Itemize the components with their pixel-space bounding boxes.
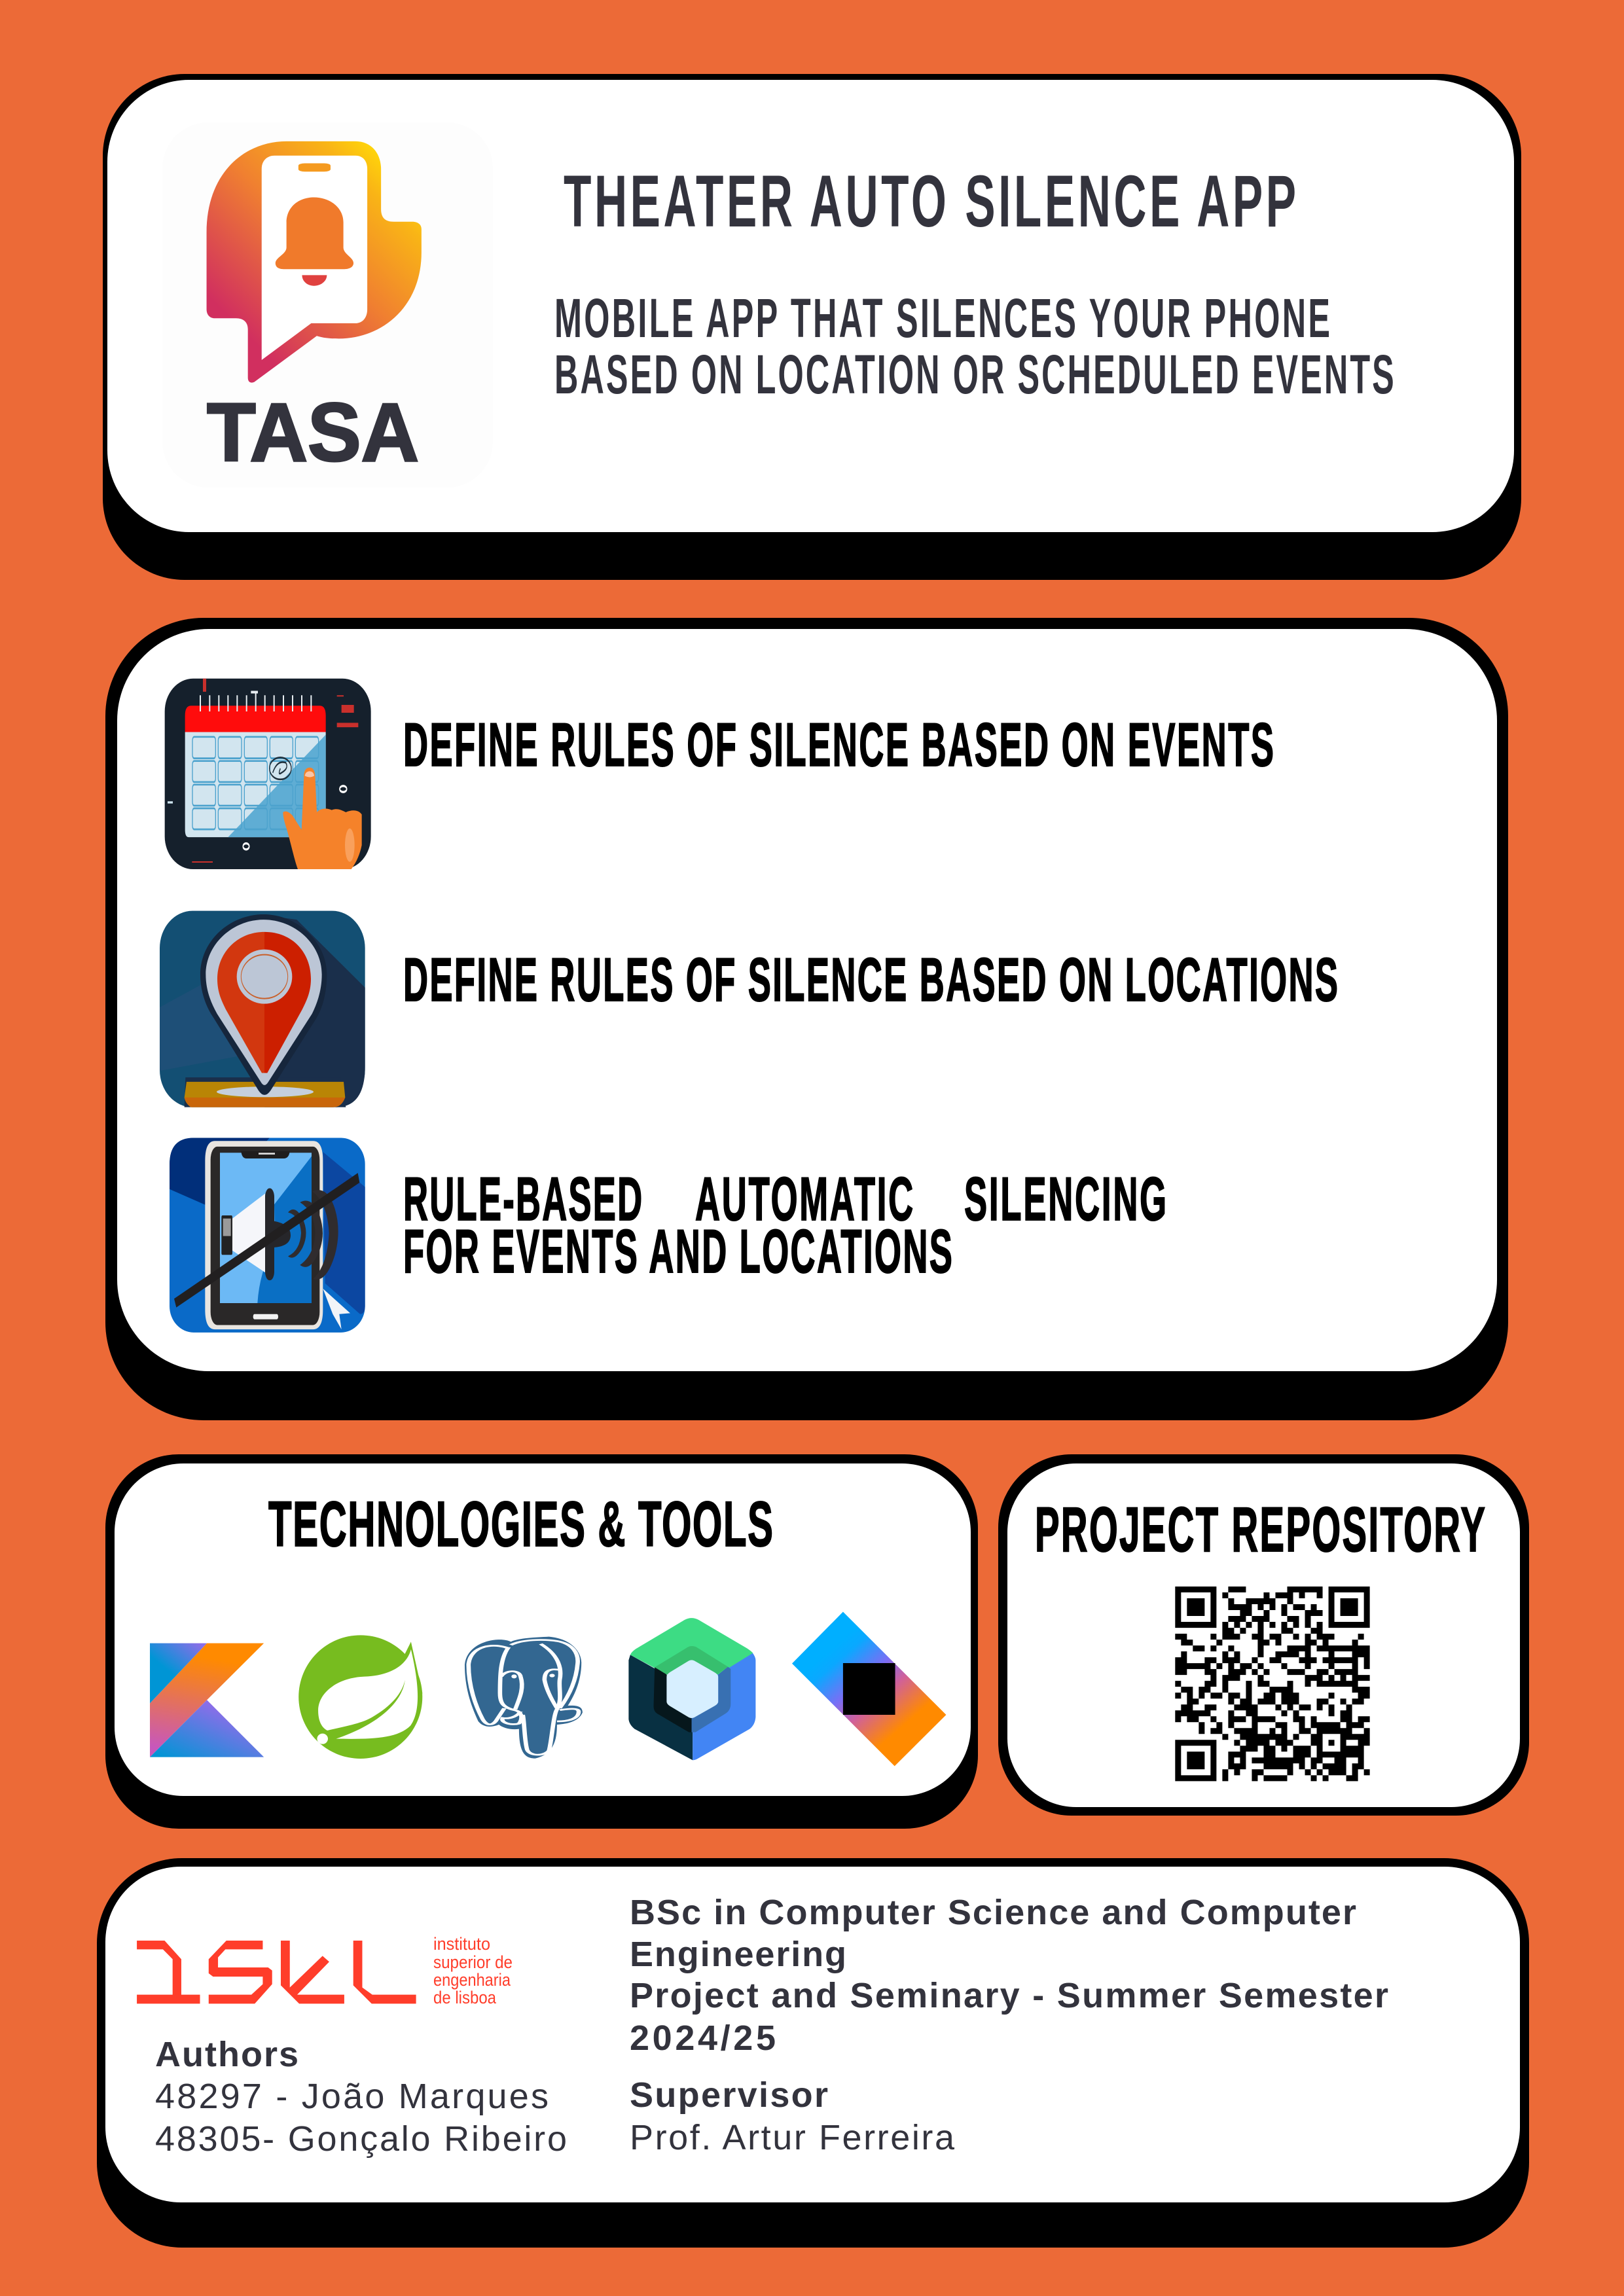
text: authors xyxy=(155,2035,567,2159)
text: feature 3 xyxy=(403,1165,1166,1286)
icon: ISEL logo: de lisboa xyxy=(433,1988,497,2007)
text: degree and project: Project and Seminary - Summer Semester xyxy=(630,1976,1388,2015)
text: feature 3: FOR EVENTS AND LOCATIONS xyxy=(403,1217,952,1286)
text: supervisor xyxy=(630,2075,955,2157)
subtitle xyxy=(554,287,1394,405)
panel: credits xyxy=(97,1858,1529,2248)
icon: phone with muted speaker xyxy=(170,1138,365,1333)
subtitle: MOBILE APP THAT SILENCES YOUR PHONE xyxy=(554,287,1330,349)
text: supervisor: Prof. Artur Ferreira xyxy=(630,2118,955,2157)
icon: Spring xyxy=(298,1635,422,1759)
text: feature 1: DEFINE RULES OF SILENCE BASED ON EVENTS xyxy=(403,711,1274,780)
panel: technologies and tools xyxy=(105,1454,978,1829)
panel: project repository xyxy=(998,1454,1529,1816)
icon: ISEL logo: superior de xyxy=(433,1952,513,1972)
icon: Kotlin xyxy=(150,1643,264,1757)
text: authors: Authors xyxy=(155,2035,298,2074)
text: degree and project: 2024/25 xyxy=(630,2018,776,2058)
icon: Jetpack Compose xyxy=(628,1618,755,1760)
icon: ISEL logo: engenharia xyxy=(433,1970,511,1990)
icon: TASA app logo xyxy=(162,122,493,488)
text: degree and project: BSc in Computer Science and Computer xyxy=(630,1893,1356,1932)
text: degree and project: Engineering xyxy=(630,1935,846,1974)
icon: location pin xyxy=(160,911,365,1107)
heading: technologies: TECHNOLOGIES & TOOLS xyxy=(268,1489,773,1560)
icon: Jetpack Compose Multiplatform xyxy=(792,1612,946,1766)
text: TASA wordmark: TASA xyxy=(207,386,419,478)
panel: features xyxy=(105,618,1508,1420)
QR code xyxy=(1175,1587,1370,1781)
icon: ISEL logo xyxy=(137,1934,513,2007)
subtitle: BASED ON LOCATION OR SCHEDULED EVENTS xyxy=(554,344,1394,405)
text: supervisor: Supervisor xyxy=(630,2075,828,2115)
text: feature 3: SILENCING xyxy=(964,1165,1166,1234)
icon: PostgreSQL xyxy=(465,1637,583,1759)
text: authors: 48305- Gonçalo Ribeiro xyxy=(155,2119,567,2159)
title: THEATER AUTO SILENCE APP xyxy=(564,160,1296,242)
text: degree and project xyxy=(630,1893,1388,2058)
icon: ISEL logo: instituto xyxy=(433,1934,490,1954)
text: feature 3: AUTOMATIC xyxy=(695,1165,913,1234)
text: authors: 48297 - João Marques xyxy=(155,2077,549,2116)
panel: app header xyxy=(103,74,1521,580)
icon: calendar with tapping hand xyxy=(165,679,371,869)
text: feature 2: DEFINE RULES OF SILENCE BASED ON LOCATIONS xyxy=(403,946,1338,1014)
text: feature 3: RULE-BASED xyxy=(403,1165,642,1234)
heading: repository: PROJECT REPOSITORY xyxy=(1035,1494,1485,1565)
